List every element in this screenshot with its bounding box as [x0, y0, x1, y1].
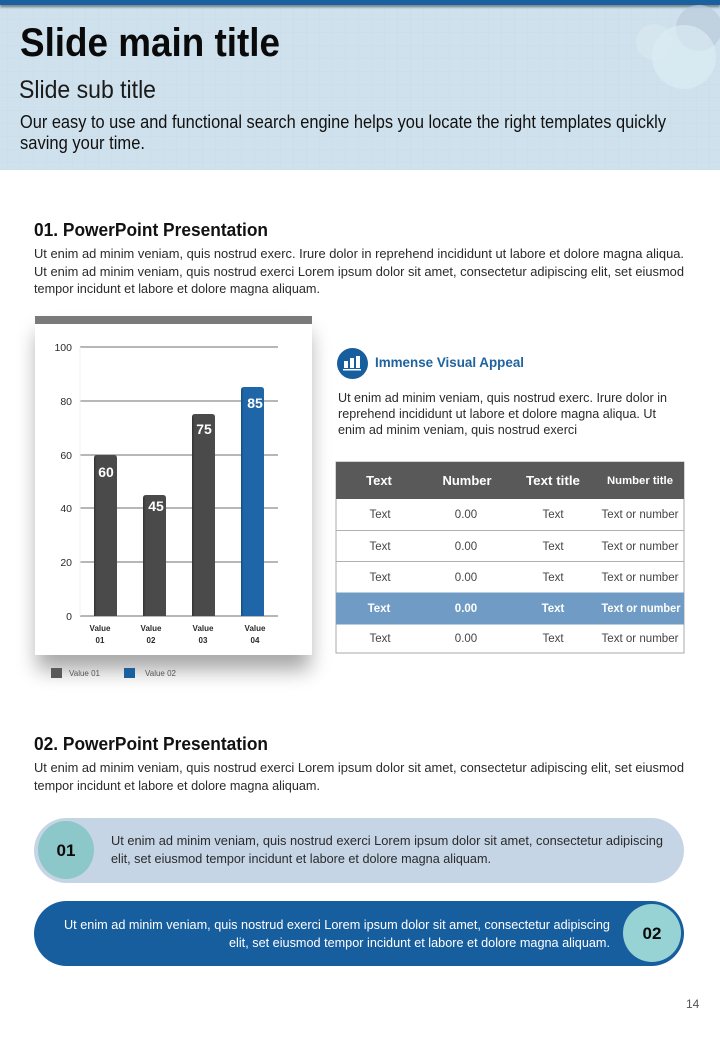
text block: visual appeal description: reprehend incididunt ut labore et dolore magna aliqua. Ut	[338, 407, 657, 421]
header banner	[0, 0, 720, 170]
bar chart: 02	[147, 636, 156, 645]
callout pill 01: Ut enim ad minim veniam, quis nostrud exerci Lorem ipsum dolor sit amet, consectetur adipiscing	[111, 834, 663, 848]
heading: section 02: 02. PowerPoint Presentation	[34, 734, 268, 754]
table highlighted row: Text or number	[602, 603, 681, 615]
bar chart: 01	[96, 636, 105, 645]
table highlighted row: Text	[542, 603, 565, 615]
bar chart: 20	[60, 557, 72, 569]
bar chart: 0	[66, 611, 72, 623]
data table: 0.00	[455, 633, 477, 645]
title: Slide main title	[20, 21, 280, 65]
chart legend: Value 02	[145, 669, 177, 678]
data table: Text	[369, 509, 391, 521]
data table: Text or number	[602, 509, 679, 521]
page number: 14	[686, 997, 700, 1011]
data table: Text or number	[602, 633, 679, 645]
data table: Text	[369, 541, 391, 553]
bar chart: 80	[60, 396, 72, 408]
table header row: Text	[366, 473, 393, 488]
bar chart: Value	[245, 624, 266, 633]
table header row: Text title	[526, 473, 580, 488]
text block: section 01 body: Ut enim ad minim veniam, quis nostrud exerc. Irure dolor in reprehend incididunt ut labore et dolore magna aliqua.	[34, 247, 684, 261]
data table	[336, 462, 684, 653]
table header row	[336, 462, 684, 499]
bar chart: Value	[90, 624, 111, 633]
bar chart: 100	[54, 342, 72, 354]
text block: section 01 body: Ut enim ad minim veniam, quis nostrud exerci Lorem ipsum dolor sit amet, consectetur adipiscing elit, set eiusmod	[34, 265, 684, 279]
text block: section 02 body	[34, 761, 684, 793]
callout pill 01	[34, 818, 684, 883]
text block: visual appeal description: Ut enim ad minim veniam, quis nostrud exerc. Irure dolor in	[338, 391, 667, 405]
bar chart: 04	[251, 636, 260, 645]
data table: Text	[542, 509, 564, 521]
bar chart: Value	[141, 624, 162, 633]
table highlighted row	[336, 592, 684, 624]
header description: saving your time.	[20, 133, 145, 153]
heading: section 01: 01. PowerPoint Presentation	[34, 220, 268, 240]
bar chart: 85	[247, 395, 263, 411]
data table: Text	[542, 572, 564, 584]
data table: Text or number	[602, 572, 679, 584]
data table: Text	[369, 572, 391, 584]
text block: section 01 body	[34, 247, 684, 296]
callout pill 02	[34, 901, 684, 966]
icon: number badge 01: 01	[57, 841, 75, 860]
header description	[20, 112, 666, 153]
callout pill 02: Ut enim ad minim veniam, quis nostrud exerci Lorem ipsum dolor sit amet, consectetur adipiscing	[64, 918, 610, 932]
bar chart: 40	[60, 503, 72, 515]
callout pill 02: elit, set eiusmod tempor incidunt et labore et dolore magna aliquam.	[229, 936, 610, 950]
table highlighted row: 0.00	[455, 603, 477, 615]
data table: Text	[542, 633, 564, 645]
data table: 0.00	[455, 541, 477, 553]
chart legend: Value 01	[69, 669, 101, 678]
bar chart: 60	[60, 450, 72, 462]
icon: number badge 01	[38, 821, 94, 879]
data table: 0.00	[455, 572, 477, 584]
icon: number badge 02: 02	[643, 924, 661, 943]
text block: section 01 body: tempor incidunt et labore et dolore magna aliquam.	[34, 282, 320, 296]
table header row: Number	[442, 473, 492, 488]
chart legend	[51, 668, 177, 678]
text block: visual appeal description: enim ad minim veniam, quis nostrud exerci	[338, 423, 577, 437]
subtitle: Slide sub title	[19, 76, 156, 104]
table header row: Number title	[607, 475, 673, 487]
table highlighted row: Text	[368, 603, 391, 615]
data table: 0.00	[455, 509, 477, 521]
text block: visual appeal description	[338, 391, 667, 437]
bar chart: 03	[199, 636, 208, 645]
callout pill 01: elit, set eiusmod tempor incidunt et labore et dolore magna aliquam.	[111, 852, 491, 866]
bar chart: Value	[193, 624, 214, 633]
icon: number badge 02	[623, 904, 681, 962]
icon: bar chart badge	[337, 348, 368, 379]
data table: Text	[542, 541, 564, 553]
bar chart: 45	[148, 498, 164, 514]
heading: immense visual appeal: Immense Visual Appeal	[375, 354, 524, 370]
text block: section 02 body: Ut enim ad minim veniam, quis nostrud exerci Lorem ipsum dolor sit amet, consectetur adipiscing elit, set eiusmod	[34, 761, 684, 775]
header description: Our easy to use and functional search engine helps you locate the right templates quickly	[20, 112, 666, 132]
data table: Text	[369, 633, 391, 645]
bar chart	[54, 342, 278, 645]
bar chart: 75	[196, 421, 212, 437]
data table: Text or number	[602, 541, 679, 553]
bar chart: 60	[98, 464, 114, 480]
text block: section 02 body: tempor incidunt et labore et dolore magna aliquam.	[34, 779, 320, 793]
panel: bar chart card	[35, 316, 312, 670]
